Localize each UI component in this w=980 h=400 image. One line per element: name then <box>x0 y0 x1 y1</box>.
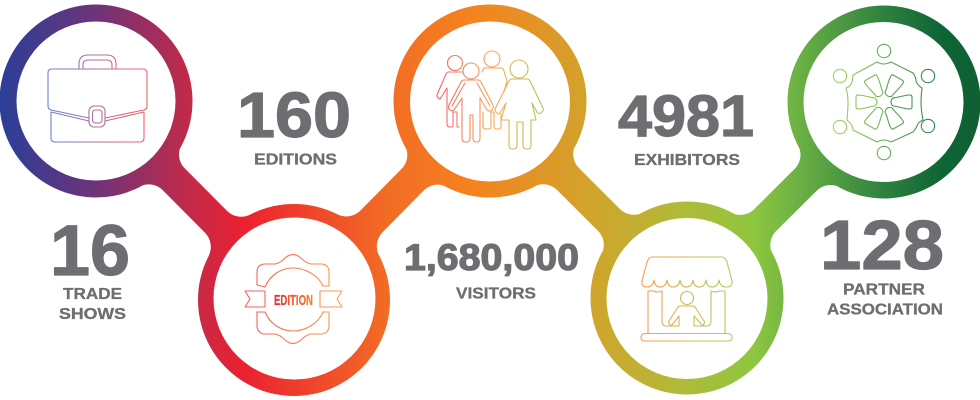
stat: 1,680,000 visitors <box>404 237 579 302</box>
number: 128: 128 <box>820 206 944 284</box>
stat: 16 trade shows <box>50 212 130 323</box>
panel: trade shows circle <box>16 22 176 180</box>
panel: edition circle <box>214 218 376 380</box>
label: partner: PARTNER <box>843 282 925 298</box>
stat: 4981 exhibitors <box>618 84 754 169</box>
number: 4981: 4981 <box>618 84 754 149</box>
label: editions: EDITIONS <box>254 152 337 168</box>
label: visitors: VISITORS <box>456 286 536 302</box>
panel: partner association circle <box>804 22 964 182</box>
number: 16: 16 <box>50 212 130 291</box>
icon: market stall <box>641 257 732 341</box>
stat: 128 partner association <box>820 206 944 318</box>
number: 160: 160 <box>237 79 351 151</box>
stat: 160 editions <box>237 79 351 168</box>
number: 1,680,000: 1,680,000 <box>404 237 579 278</box>
panel: exhibitors circle <box>606 218 768 379</box>
label: association: ASSOCIATION <box>827 302 943 318</box>
icon: briefcase <box>48 55 147 142</box>
label: shows: SHOWS <box>59 306 126 323</box>
icon: network of partners <box>833 44 935 160</box>
icon: group of people <box>437 51 543 149</box>
label: trade: TRADE <box>63 286 122 303</box>
icon: edition badge <box>245 254 342 344</box>
edition label: EDITION <box>274 292 313 309</box>
label: exhibitors: EXHIBITORS <box>634 152 740 169</box>
panel: visitors circle <box>410 22 570 182</box>
